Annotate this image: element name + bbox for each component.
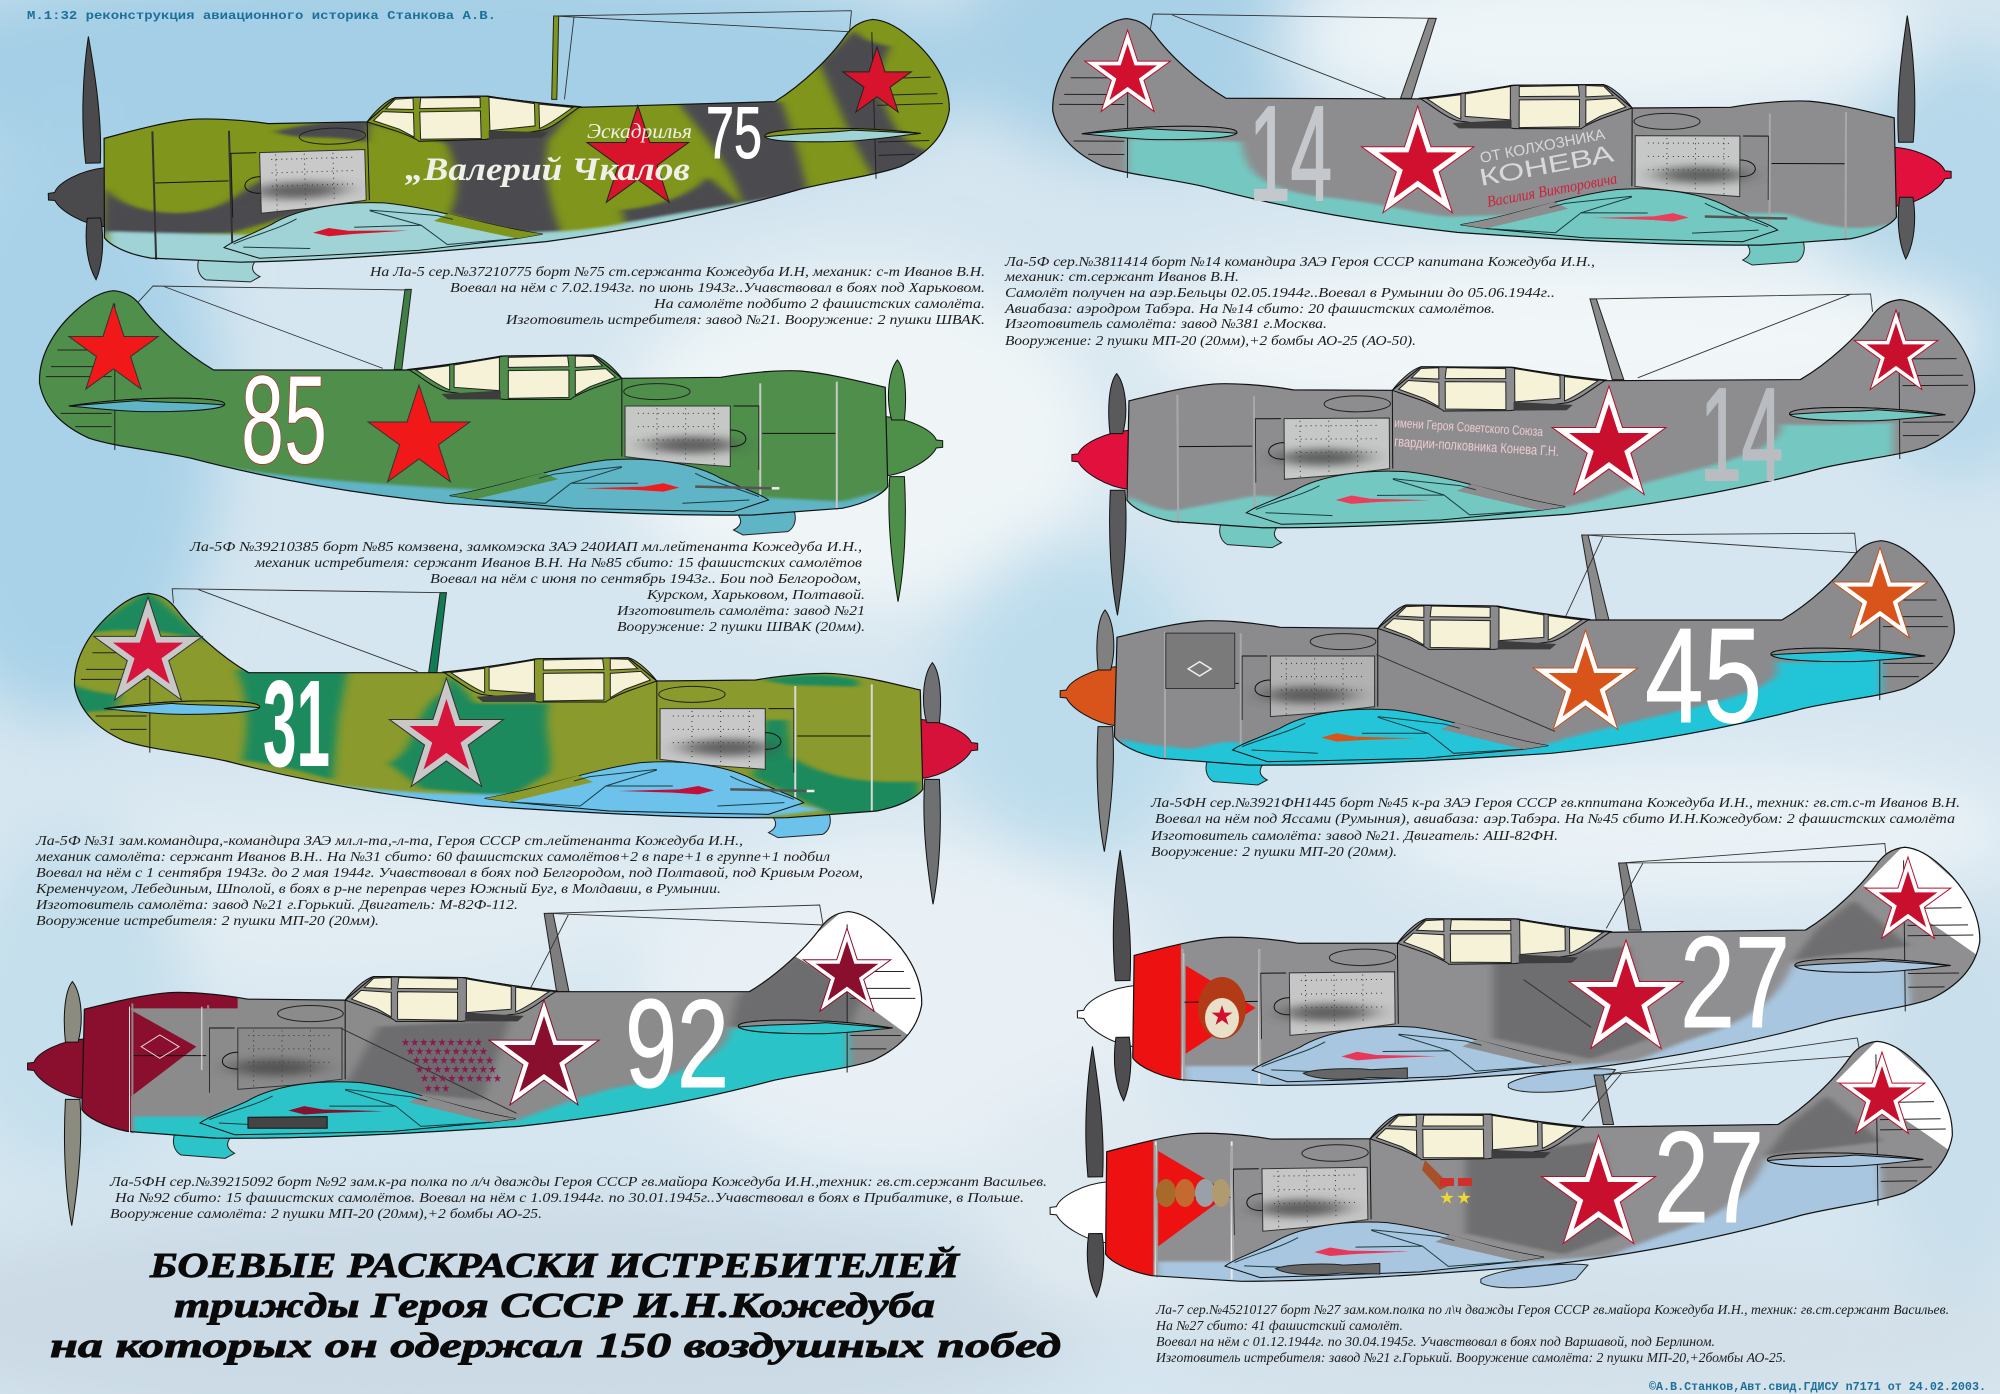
inscription: „Валерий Чкалов: [405, 152, 690, 188]
victory stars: ★★★★★★★★★: [412, 1054, 494, 1067]
title: на которых он одержал 150 воздушных побед: [50, 1326, 1061, 1365]
victory stars: ★★★★★★★★★: [401, 1036, 483, 1049]
caption: No.27: Ла-7 сер.№45210127 борт №27 зам.ком.полка по л\ч дважды Героя СССР гв.майора Кожедуба И.Н., техник: гв.ст.сержант Васильев.: [1155, 1302, 1949, 1317]
caption: No.14 first: механик: ст.сержант Иванов В.Н.: [1004, 269, 1239, 284]
number 27: 27: [1654, 1104, 1764, 1250]
caption: No.45: Воевал на нём под Яссами (Румыния), авиабаза: аэр.Табэра. На №45 сбито И.Н.Кожедубом: 2 фашистских самолёта: [1155, 811, 1955, 827]
victory stars: [401, 1036, 502, 1095]
caption: No.27: На №27 сбито: 41 фашистский самолёт.: [1155, 1318, 1403, 1333]
caption: No.31: Вооружение истребителя: 2 пушки МП-20 (20мм).: [36, 913, 379, 929]
plane: La-7 No.27 upper: [1076, 840, 1989, 1101]
underside: [1123, 138, 1889, 244]
tail star: [94, 597, 202, 700]
caption: No.85: Воевал на нём с июня по сентябрь 1943г.. Бои под Белгородом,: [430, 571, 861, 586]
inscription: Эскадрилья: [587, 119, 692, 143]
caption: No.85: Вооружение: 2 пушки ШВАК (20мм).: [617, 619, 865, 635]
caption: No.85: [189, 539, 865, 635]
tail star: [1854, 310, 1938, 390]
tail star: [1832, 548, 1928, 638]
tail star: [1839, 1052, 1925, 1133]
caption: No.85: Изготовитель самолёта: завод №21: [616, 603, 865, 618]
inscription: [1477, 126, 1619, 211]
camouflage, tail and underside: [69, 907, 930, 1143]
plane: La-5F No.14 first: [1038, 13, 1952, 266]
caption: No.45: Вооружение: 2 пушки МП-20 (20мм).: [1151, 844, 1397, 860]
caption: No.27: [1155, 1302, 1949, 1365]
plane: La-7 No.27 lower: [1048, 1034, 1961, 1298]
number 85: 85: [241, 351, 327, 490]
copyright: ©А.В.Станков,Авт.свид.ГДИСУ n7171 от 24.02.2003.: [1649, 1381, 1986, 1394]
plane: La-5F No.85: [39, 286, 943, 602]
caption: No.75: Воевал на нём с 7.02.1943г. по июнь 1943г..Учавствовал в боях под Харьковом.: [450, 280, 985, 295]
plane: La-5F No.14 second: [1071, 294, 1976, 616]
tail star: [803, 928, 891, 1011]
caption: No.75: Изготовитель истребителя: завод №21. Вооружение: 2 пушки ШВАК.: [505, 312, 985, 327]
number 75: 75: [706, 93, 762, 174]
caption: No.14 first: Вооружение: 2 пушки МП-20 (20мм),+2 бомбы АО-25 (АО-50).: [1005, 333, 1416, 349]
tail star: [1085, 30, 1170, 111]
caption: No.92: На №92 сбито: 15 фашистских самолётов. Воевал на нём с 1.09.1944г. по 30.01.1945г..Учавствовал в боях в Прибалтике, в Польше.: [114, 1190, 1024, 1205]
fuselage star: [1541, 1135, 1656, 1244]
panel lines and emblem: [1166, 633, 1555, 731]
caption: No.31: механик самолёта: сержант Иванов В.Н.. На №31 сбито: 60 фашистских самолётов+2 в паре+1 в группе+1 подбил: [35, 849, 830, 864]
caption: No.14 first: Авиабаза: аэродром Табэра. На №14 сбито: 20 фашистских самолётов.: [1004, 301, 1495, 316]
caption: No.92: Ла-5ФН сер.№39215092 борт №92 зам.к-ра полка по л/ч дважды Героя СССР гв.майора Кожедуба И.Н.,техник: гв.ст.сержант Васильев.: [109, 1174, 1047, 1189]
title: трижды Героя СССР И.Н.Кожедуба: [174, 1286, 935, 1325]
victory stars: ★★★★★★★★★: [406, 1045, 488, 1058]
tail star: [843, 47, 911, 112]
camouflage and underside: [64, 590, 918, 833]
plane: La-5 No.75: [44, 11, 954, 288]
caption: No.31: [35, 833, 863, 929]
caption: No.92: [109, 1174, 1047, 1222]
number 92: 92: [625, 975, 729, 1114]
number 45: 45: [1645, 600, 1762, 751]
top note: scale and author: М.1:32 реконструкция авиационного историка Станкова А.В.: [27, 10, 496, 23]
victory stars: ★★★: [424, 1082, 450, 1095]
caption: No.85: Ла-5Ф №39210385 борт №85 комзвена, замкомэска ЗАЭ 240ИАП мл.лейтенанта Кожедуба И.Н.,: [189, 539, 862, 554]
camouflage, tail, cowl and underside: [1074, 1035, 1961, 1283]
bomb and underwing fairing: [1276, 1263, 1588, 1288]
fuselage star: [1552, 386, 1666, 495]
tail star: [1865, 857, 1951, 938]
number 14: 14: [1700, 361, 1783, 508]
number 27: 27: [1680, 909, 1790, 1055]
caption: No.45: [1150, 795, 1960, 860]
plane: La-5FN No.92: [28, 905, 930, 1226]
inscription: [405, 119, 692, 188]
inscription: гвардии-полковника Конева Г.Н.: [1394, 433, 1559, 459]
caption: No.31: Изготовитель самолёта: завод №21 г.Горький. Двигатель: М-82Ф-112.: [35, 897, 518, 912]
fuselage star: [389, 678, 503, 787]
guards badge: [1198, 977, 1246, 1039]
inscription: [1394, 415, 1559, 459]
camouflage and underside: [102, 30, 944, 263]
fuselage star: [587, 106, 689, 202]
caption: No.75: [369, 264, 985, 327]
caption: No.14 first: Ла-5Ф сер.№3811414 борт №14 командира ЗАЭ Героя СССР капитана Кожедуба И.Н.,: [1004, 254, 1595, 269]
inscription: имени Героя Советского Союза: [1394, 415, 1544, 439]
camouflage, tail, cowl and underside: [1101, 840, 1989, 1087]
caption: No.14 first: [1004, 254, 1595, 349]
caption: No.75: На самолёте подбито 2 фашистских самолёта.: [653, 296, 985, 311]
number 14: 14: [1249, 78, 1332, 229]
tail star: [69, 304, 158, 389]
caption: No.92: Вооружение самолёта: 2 пушки МП-20 (20мм),+2 бомбы АО-25.: [110, 1206, 542, 1222]
inscription: КОНЕВА: [1477, 140, 1616, 192]
victory stars: ★★★★★★★★★: [415, 1063, 497, 1076]
award medals: [1156, 1160, 1472, 1207]
caption: No.45: Ла-5ФН сер.№3921ФН1445 борт №45 к-ра ЗАЭ Героя СССР гв.кппитана Кожедуба И.Н., техник: гв.ст.с-т Иванов В.Н.: [1150, 795, 1960, 810]
fuselage star: [489, 1000, 599, 1105]
caption: No.75: На Ла-5 сер.№37210775 борт №75 ст.сержанта Кожедуба И.Н, механик: с-т Иванов В.Н.: [369, 264, 985, 279]
caption: No.31: Воевал на нём с 1 сентября 1943г. до 2 мая 1944г. Учавствовал в боях под Белгородом, под Полтавой, под Кривым Рогом,: [36, 865, 863, 880]
fuselage star: [368, 385, 470, 482]
plane: La-5FN No.45: [1060, 533, 1954, 852]
plane: La-5F No.31: [64, 589, 978, 904]
title: [50, 1244, 1061, 1365]
fuselage star: [1533, 630, 1638, 729]
caption: No.45: Изготовитель самолёта: завод №21. Двигатель: АШ-82ФН.: [1150, 828, 1558, 843]
victory stars: ★★★★★★★★★: [420, 1072, 502, 1085]
underside: [1128, 422, 1925, 531]
underside: [220, 464, 884, 514]
caption: No.31: Ла-5Ф №31 зам.командира,-командира ЗАЭ мл.л-та,-л-та, Героя СССР ст.лейтенанта Кожедуба И.Н.,: [35, 833, 743, 848]
bomb and underwing fairing: [1303, 980, 1615, 1092]
caption: No.85: Курском, Харьковом, Полтавой.: [646, 587, 865, 602]
caption: No.85: механик истребителя: сержант Иванов В.Н. На №85 сбито: 15 фашистских самолётов: [254, 555, 862, 570]
fuselage star: [1362, 106, 1474, 213]
caption: No.14 first: Изготовитель самолёта: завод №381 г.Москва.: [1004, 316, 1327, 331]
caption: No.31: Кременчугом, Лебединым, Шполой, в боях в р-не переправ через Южный Буг, в Молдавии, в Румынии.: [35, 881, 721, 896]
panel lines and bomb: [129, 1007, 517, 1133]
inscription: Василия Викторовича: [1486, 170, 1619, 211]
caption: No.27: Изготовитель истребителя: завод №21 г.Горький. Вооружение самолёта: 2 пушки МП-20,+2бомбы АО-25.: [1155, 1350, 1786, 1365]
underside: [1117, 660, 1888, 764]
fuselage star: [1569, 940, 1683, 1049]
caption: No.14 first: Самолёт получен на аэр.Бельцы 02.05.1944г..Воевал в Румынии до 05.06.1944г..: [1005, 285, 1555, 300]
caption: No.27: Воевал на нём с 01.12.1944г. по 30.04.1945г. Учавствовал в боях под Варшавой, под Берлином.: [1156, 1334, 1715, 1349]
inscription: ОТ КОЛХОЗНИКА: [1479, 126, 1606, 167]
title: БОЕВЫЕ РАСКРАСКИ ИСТРЕБИТЕЛЕЙ: [149, 1244, 961, 1285]
plane: La-5F No.31: 31: [263, 656, 330, 793]
